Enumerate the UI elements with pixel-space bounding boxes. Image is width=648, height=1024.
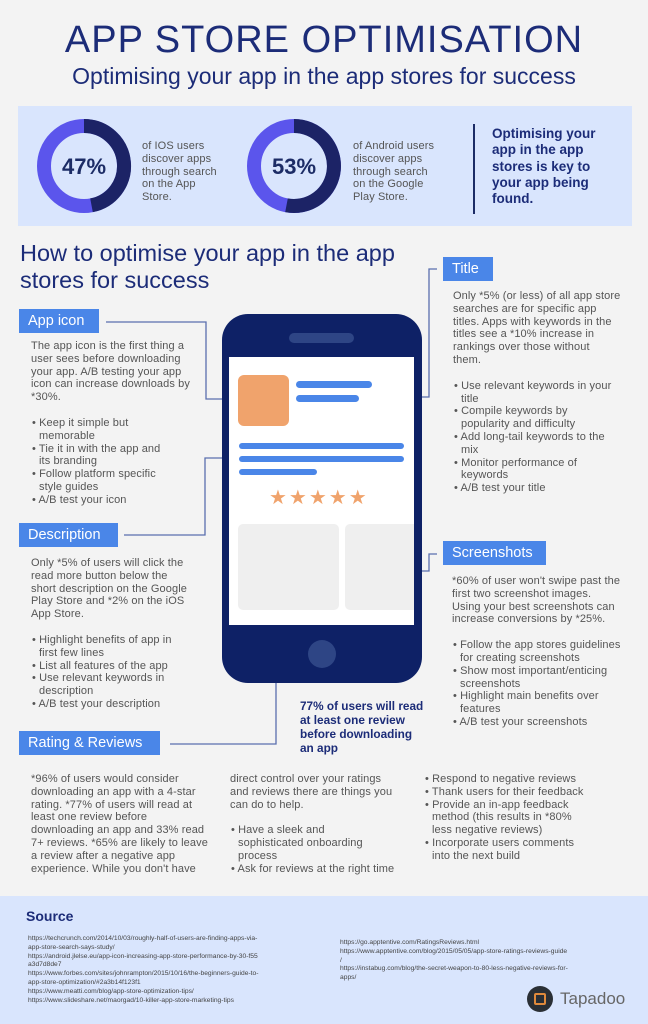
text: Android stat: on the Google <box>353 178 423 190</box>
text: ratings col 3: less negative reviews) <box>432 824 542 836</box>
text: title: Add long-tail keywords to the <box>461 431 605 443</box>
logo: Tapadoo <box>527 986 625 1012</box>
phone illustration <box>222 314 422 683</box>
text: app icon: Keep it simple but <box>39 417 128 429</box>
home button <box>308 640 336 668</box>
logo: Tapadoo: Tapadoo <box>560 989 625 1008</box>
text: sources left: https://www.forbes.com/sites/johnrampton/2015/10/16/the-beginners-guide-to- <box>28 970 258 977</box>
text: sources left: https://www.meatti.com/blog/app-store-optimization-tips/ <box>28 988 194 995</box>
screen <box>229 357 414 625</box>
text: ratings col 2: process <box>238 850 277 862</box>
text: title: Only *5% (or less) of all app store <box>453 290 620 302</box>
text: ratings col 1 <box>31 773 208 875</box>
text: description: List all features of the app <box>39 660 168 672</box>
text: description <box>31 557 187 710</box>
callout: 77% review: before downloading <box>300 727 412 741</box>
callout: key message: found. <box>492 191 533 206</box>
label: Description <box>19 523 118 547</box>
text: screenshots: Follow the app stores guidelines <box>460 639 620 651</box>
text: app icon <box>31 340 190 506</box>
label: Title <box>443 257 493 281</box>
panel: sources <box>0 896 648 1024</box>
text: title: titles see a *10% increase in <box>453 328 594 340</box>
panel: stats <box>18 106 632 226</box>
text: screenshots: for creating screenshots <box>460 652 580 664</box>
text: ratings col 2: direct control over your ratings <box>230 773 381 785</box>
text: app icon: your app. A/B testing your app <box>31 366 181 378</box>
chart: donut 47% <box>37 119 132 213</box>
text: ratings col 3: Incorporate users comments <box>432 837 574 849</box>
text: title: mix <box>461 444 478 456</box>
text: title: titles. Apps with keywords in the <box>453 316 612 328</box>
stars: ★★★★★ <box>269 487 369 509</box>
text: description: Only *5% of users will click the <box>31 557 183 569</box>
text: sources left <box>28 935 258 1004</box>
callout: key message: Optimising your <box>492 126 596 141</box>
text: description: A/B test your description <box>39 698 160 710</box>
text: sources left: https://www.slideshare.net/maorgad/10-killer-app-store-marketing-tips <box>28 997 234 1004</box>
text: ratings col 3 <box>425 773 584 862</box>
text: ratings col 1: a review after a negative app <box>31 850 175 862</box>
text: description: Use relevant keywords in <box>39 672 164 684</box>
text: description: read more button below the <box>31 570 168 582</box>
chart: donut 53% <box>247 119 341 213</box>
text: Android stat: discover apps <box>353 153 422 165</box>
text: app icon: A/B test your icon <box>39 494 127 506</box>
text: title: popularity and difficulty <box>461 418 575 430</box>
text: ratings col 3: into the next build <box>432 850 520 862</box>
text: ratings col 2: Have a sleek and <box>238 824 325 836</box>
label: App icon: App icon <box>28 313 84 329</box>
text: iOS stat: discover apps <box>142 153 211 165</box>
text: app icon: *30%. <box>31 391 61 403</box>
text: sources right <box>340 939 568 981</box>
label: Title: Title <box>452 261 479 277</box>
text: ratings col 1: least one review before <box>31 811 147 823</box>
text: ratings col 1: experience. While you don't have <box>31 863 196 875</box>
text: app icon: icon can increase downloads by <box>31 378 190 390</box>
text: ratings col 2: can do to help. <box>230 799 304 811</box>
text: description: App Store. <box>31 608 84 620</box>
label: Screenshots: Screenshots <box>452 545 533 561</box>
text: ratings col 2: Ask for reviews at the right time <box>238 863 394 875</box>
text: Android stat: of Android users <box>353 140 434 152</box>
text: Android stat: through search <box>353 166 428 178</box>
text: title: A/B test your title <box>461 482 546 494</box>
text: screenshots: A/B test your screenshots <box>460 716 587 728</box>
text: title: Compile keywords by <box>461 405 568 417</box>
text: sources right: apps/ <box>340 974 356 981</box>
text: screenshots: first two screenshot images. <box>452 588 591 600</box>
text: Android stat: Play Store. <box>353 191 408 203</box>
text: screenshots: Show most important/enticing <box>460 665 607 677</box>
callout: 77% review: 77% of users will read <box>300 699 423 713</box>
text: ratings col 3: Provide an in-app feedback <box>432 799 569 811</box>
divider <box>473 124 475 214</box>
text: sources left: https://techcrunch.com/2014/10/03/roughly-half-of-users-are-finding-apps-via- <box>28 935 257 942</box>
text: description: Highlight benefits of app in <box>39 634 172 646</box>
label: Rating & Reviews <box>19 731 160 755</box>
callout: key message <box>492 126 596 206</box>
app icon square <box>238 375 289 426</box>
callout: 77% review: at least one review <box>300 713 405 727</box>
text: description: description <box>39 685 93 697</box>
text: ratings col 1: *96% of users would consider <box>31 773 179 785</box>
label: App icon <box>19 309 99 333</box>
text: app icon: memorable <box>39 430 95 442</box>
text: app icon: style guides <box>39 481 98 493</box>
text: screenshots <box>452 575 620 728</box>
text: ratings col 1: downloading an app with a 4-star <box>31 786 196 798</box>
text: title: rankings over those without <box>453 341 590 353</box>
callout: key message: app in the app <box>492 142 584 157</box>
heading: how to: stores for success <box>20 267 209 293</box>
text: sources right: https://go.apptentive.com/RatingsReviews.html <box>340 939 479 946</box>
label: Screenshots <box>443 541 546 565</box>
text: title <box>453 290 620 494</box>
callout: key message: your app being <box>492 175 589 190</box>
text: iOS stat: on the App <box>142 178 196 190</box>
text: screenshots: increase conversions by *25%. <box>452 613 605 625</box>
label: Description: Description <box>28 527 101 543</box>
text: title: searches are for specific app <box>453 303 597 315</box>
text: app icon: The app icon is the first thing a <box>31 340 184 352</box>
text: ratings col 3: Respond to negative reviews <box>432 773 576 785</box>
text: app icon: its branding <box>39 455 97 467</box>
text: sources right: / <box>340 957 342 964</box>
text: iOS stat: through search <box>142 166 217 178</box>
text: title: Monitor performance of <box>461 457 577 469</box>
text: sources left: app-store-optimization/#2a3b14f123f1 <box>28 979 141 986</box>
text: screenshots: screenshots <box>460 678 520 690</box>
text: iOS stat <box>142 140 217 203</box>
text: title: keywords <box>461 469 508 481</box>
text: ratings col 3: Thank users for their feedback <box>432 786 584 798</box>
text: description: Play Store and *2% on the iOS <box>31 595 184 607</box>
label: Rating & Reviews: Rating & Reviews <box>28 735 142 751</box>
text: sources left: a3d7d8de7 <box>28 961 61 968</box>
text: sources left: https://android.jlelse.eu/app-icon-increasing-app-store-performance-by-30-f55 <box>28 953 258 960</box>
heading: how to <box>20 240 395 293</box>
chart: donut 53%: 53% <box>272 154 316 179</box>
text: ratings col 1: 7+ reviews. *65% are likely to leave <box>31 837 208 849</box>
text: title: them. <box>453 354 481 366</box>
title: APP STORE OPTIMISATION <box>65 19 583 61</box>
text: screenshots: Using your best screenshots can <box>452 601 615 613</box>
text: description: first few lines <box>39 647 104 659</box>
subtitle: Optimising your app in the app stores for success <box>72 63 576 89</box>
text: sources right: https://instabug.com/blog/the-secret-weapon-to-80-less-negative-reviews-for- <box>340 965 568 972</box>
heading: how to: How to optimise your app in the app <box>20 240 395 266</box>
text: sources left: app-store-search-says-study/ <box>28 944 115 951</box>
text: ratings col 1: rating. *77% of users will read at <box>31 799 192 811</box>
text: ratings col 2: sophisticated onboarding <box>238 837 363 849</box>
text: ratings col 3: method (this results in *80% <box>432 811 572 823</box>
text: Android stat <box>353 140 434 203</box>
text: title: Use relevant keywords in your <box>461 380 611 392</box>
heading: Source: Source <box>26 908 73 924</box>
text: app icon: Follow platform specific <box>39 468 156 480</box>
screenshot boxes <box>238 524 339 610</box>
text: ratings col 1: downloading an app and 33% read <box>31 824 204 836</box>
text: iOS stat: of IOS users <box>142 140 204 152</box>
text: title: title <box>461 393 479 405</box>
text: ratings col 2 <box>230 773 394 875</box>
text: app icon: user sees before downloading <box>31 353 181 365</box>
text: description: short description on the Google <box>31 583 187 595</box>
text: screenshots: features <box>460 703 501 715</box>
text: sources right: https://www.apptentive.com/blog/2015/05/05/app-store-ratings-reviews-guide <box>340 948 567 955</box>
callout: 77% review: an app <box>300 741 338 755</box>
text: screenshots: Highlight main benefits over <box>460 690 599 702</box>
text: app icon: Tie it in with the app and <box>39 443 160 455</box>
text: iOS stat: Store. <box>142 191 172 203</box>
chart: donut 47%: 47% <box>62 154 106 179</box>
callout: 77% review <box>300 699 423 755</box>
text: screenshots: *60% of user won't swipe past the <box>452 575 620 587</box>
callout: key message: stores is key to <box>492 159 590 174</box>
speaker <box>289 333 354 343</box>
text: ratings col 2: and reviews there are things you <box>230 786 392 798</box>
